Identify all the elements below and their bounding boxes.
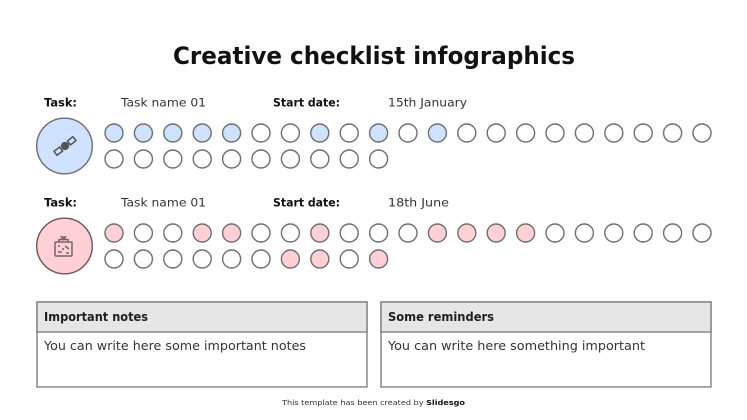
important notes heading: Important notes — [44, 310, 148, 324]
task 1 label: Task: — [44, 96, 77, 110]
title: Creative checklist infographics — [173, 42, 575, 70]
panel: task 2 — [37, 196, 711, 274]
checklist dots: task 1 — [105, 124, 711, 168]
important notes body: You can write here some important notes — [43, 339, 306, 353]
task 2 label: Task: — [44, 196, 77, 210]
task 1 name: Task name 01 — [120, 96, 206, 110]
panel: important notes — [37, 302, 367, 387]
panel: task 1 — [37, 96, 711, 174]
task 2 name: Task name 01 — [120, 196, 206, 210]
some reminders heading: Some reminders — [388, 310, 494, 324]
task 2 start date label: Start date: — [273, 196, 340, 210]
icon: satellite badge — [37, 118, 92, 174]
some reminders body: You can write here something important — [387, 339, 645, 353]
footer credit: This template has been created by Slidesgo — [281, 399, 465, 407]
task 2 start date: 18th June — [388, 196, 449, 210]
checklist dots: task 2 — [105, 224, 711, 268]
panel: some reminders — [381, 302, 711, 387]
icon: map board badge — [37, 218, 92, 274]
task 1 start date label: Start date: — [273, 96, 340, 110]
task 1 start date: 15th January — [388, 96, 467, 110]
